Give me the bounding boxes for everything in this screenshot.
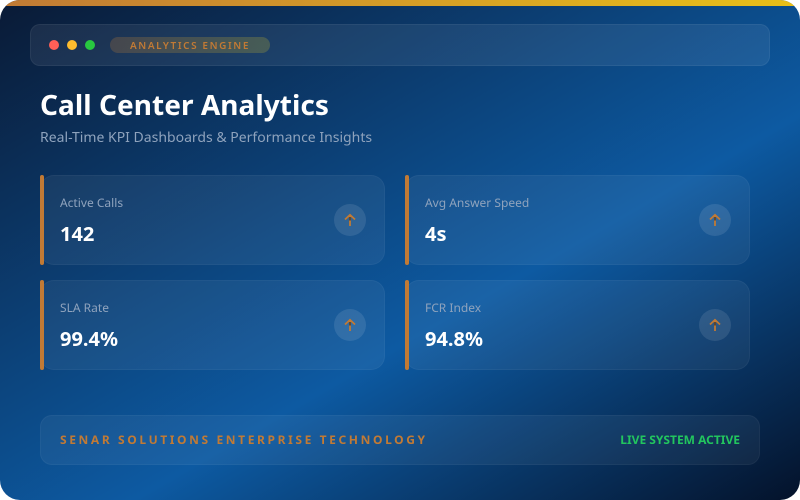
window dot: red (49, 40, 59, 50)
icon: up arrow (334, 309, 366, 341)
footer bar (40, 415, 760, 465)
brand text: SENAR SOLUTIONS ENTERPRISE TECHNOLOGY (60, 431, 428, 448)
badge: analytics engine: ANALYTICS ENGINE (130, 38, 250, 52)
panel: sla rate (40, 280, 385, 370)
icon: up arrow (699, 204, 731, 236)
window dot: yellow (67, 40, 77, 50)
label: FCR Index (425, 299, 481, 316)
subtitle: Real-Time KPI Dashboards & Performance Insights (40, 128, 372, 147)
label: Avg Answer Speed (425, 194, 529, 211)
panel: active calls (40, 175, 385, 265)
icon: up arrow (334, 204, 366, 236)
label: SLA Rate (60, 299, 109, 316)
icon: up arrow (699, 309, 731, 341)
label: Active Calls (60, 194, 123, 211)
card accent (40, 280, 44, 370)
window dot: green (85, 40, 95, 50)
value: 142 (60, 220, 94, 247)
value: 99.4% (60, 325, 118, 352)
value: 4s (425, 220, 446, 247)
card accent (405, 175, 409, 265)
panel: avg answer speed (405, 175, 750, 265)
title: Call Center Analytics (40, 86, 329, 124)
live status: LIVE SYSTEM ACTIVE (620, 431, 740, 448)
card accent (40, 175, 44, 265)
panel: fcr index (405, 280, 750, 370)
top accent bar (0, 0, 800, 6)
window header bar (30, 24, 770, 66)
badge: analytics engine (110, 37, 270, 53)
value: 94.8% (425, 325, 483, 352)
card accent (405, 280, 409, 370)
